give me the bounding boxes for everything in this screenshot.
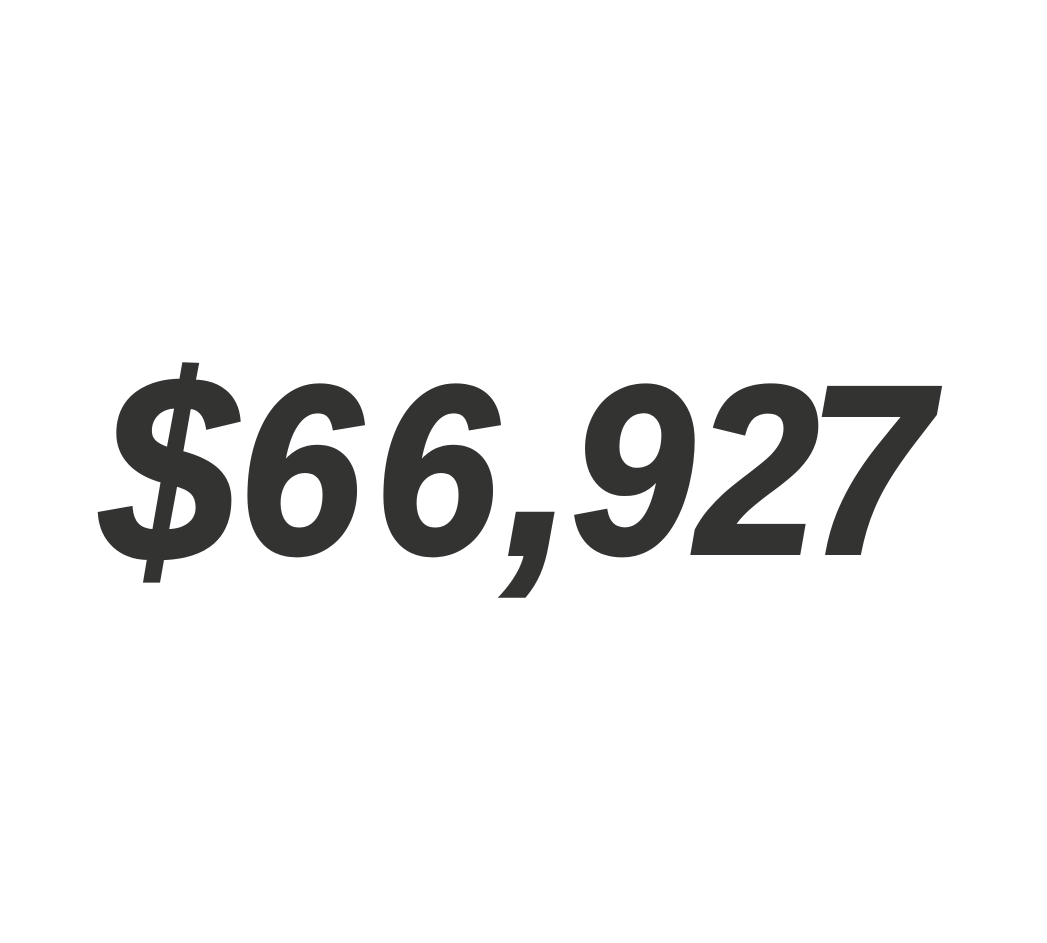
big number: $66,927: 9 — [571, 335, 694, 604]
big number: $66,927: , — [501, 309, 574, 611]
big number: $66,927: 6 — [375, 335, 499, 604]
big number: $66,927: 6 — [239, 335, 363, 604]
big number: $66,927: $ — [99, 321, 239, 617]
big number: $66,927: 2 — [692, 335, 819, 604]
big number: $66,927: 7 — [808, 335, 941, 604]
